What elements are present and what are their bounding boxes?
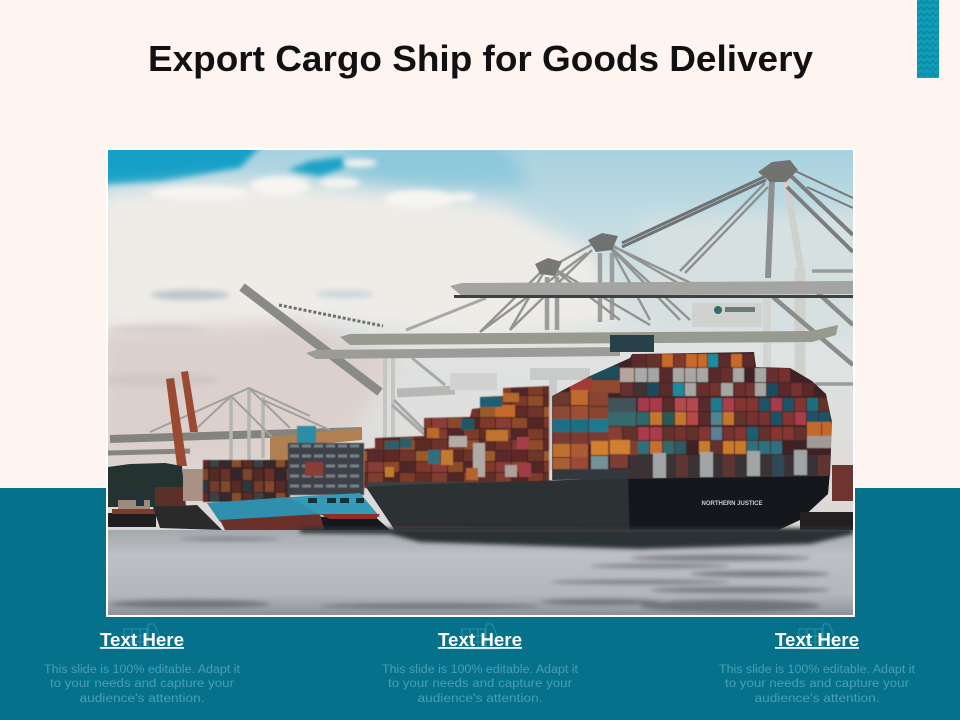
machine room	[692, 303, 762, 327]
crane cables to top tower	[622, 177, 766, 247]
column: centre	[382, 624, 579, 705]
crane tower middle	[547, 253, 612, 330]
text centre: to your needs and capture your	[388, 678, 572, 690]
wide left columns	[553, 390, 638, 469]
big crane background structure	[242, 170, 853, 438]
quay cargo	[832, 465, 853, 501]
quay	[800, 512, 853, 532]
text right: This slide is 100% editable. Adapt it	[719, 664, 916, 676]
far crane group	[107, 387, 362, 462]
text left	[44, 664, 241, 705]
upper boom	[450, 281, 853, 296]
trolley	[450, 373, 497, 390]
ship left hull	[366, 478, 630, 530]
top crane head	[758, 160, 798, 182]
blue ship containers	[203, 426, 364, 502]
text right: audience's attention.	[754, 693, 880, 705]
corner accent tab	[917, 0, 939, 78]
text centre: This slide is 100% editable. Adapt it	[382, 664, 579, 676]
orange booms	[166, 371, 198, 466]
column: left	[44, 624, 241, 705]
text left: to your needs and capture your	[50, 678, 234, 690]
cloud puffs and shadows	[100, 159, 476, 387]
crane boom left diagonal	[242, 287, 380, 392]
icon: container crane left	[124, 624, 162, 649]
upper rows	[570, 354, 814, 396]
ship bridge block	[610, 335, 654, 352]
text centre	[382, 664, 579, 705]
main container stack	[552, 350, 834, 482]
sky	[108, 150, 853, 550]
text right	[719, 664, 916, 705]
heading right: Text Here	[775, 630, 859, 650]
water	[108, 530, 853, 616]
ship bow hull	[628, 476, 830, 530]
text centre: audience's attention.	[418, 693, 542, 705]
photo frame	[106, 148, 855, 617]
heading left: Text Here	[100, 630, 184, 650]
small boat	[108, 492, 156, 527]
teal lower band	[0, 488, 960, 720]
cloud mass	[100, 182, 860, 470]
distant tree line	[108, 463, 186, 507]
heading centre: Text Here	[438, 630, 522, 650]
blue sky patches	[108, 150, 348, 189]
white frame	[530, 368, 590, 470]
orange gantry behind blue ship	[270, 428, 362, 461]
soft blue sky wash	[345, 140, 530, 185]
blue ship hull	[207, 493, 390, 532]
text left: audience's attention.	[80, 693, 204, 705]
text right: to your needs and capture your	[725, 678, 909, 690]
icon: container crane centre	[462, 624, 500, 649]
stays right	[793, 170, 853, 208]
far ship	[153, 469, 222, 530]
column: right	[719, 624, 916, 705]
water shadow	[300, 528, 853, 549]
text left: This slide is 100% editable. Adapt it	[44, 664, 241, 676]
third boom	[306, 347, 620, 359]
top tower	[768, 180, 772, 278]
photo: cargo ship at port	[90, 134, 860, 616]
title: Export Cargo Ship for Goods Delivery	[148, 38, 813, 79]
water dark ripples	[110, 538, 830, 612]
left container stack	[364, 386, 551, 488]
lashing bridges	[553, 450, 833, 482]
middle rows	[608, 398, 832, 454]
ship name: NORTHERN JUSTICE	[701, 501, 763, 507]
second boom	[340, 325, 838, 345]
ship left hull rust line	[393, 526, 630, 530]
middle crane head	[588, 233, 618, 252]
icon: container crane right	[799, 624, 837, 649]
